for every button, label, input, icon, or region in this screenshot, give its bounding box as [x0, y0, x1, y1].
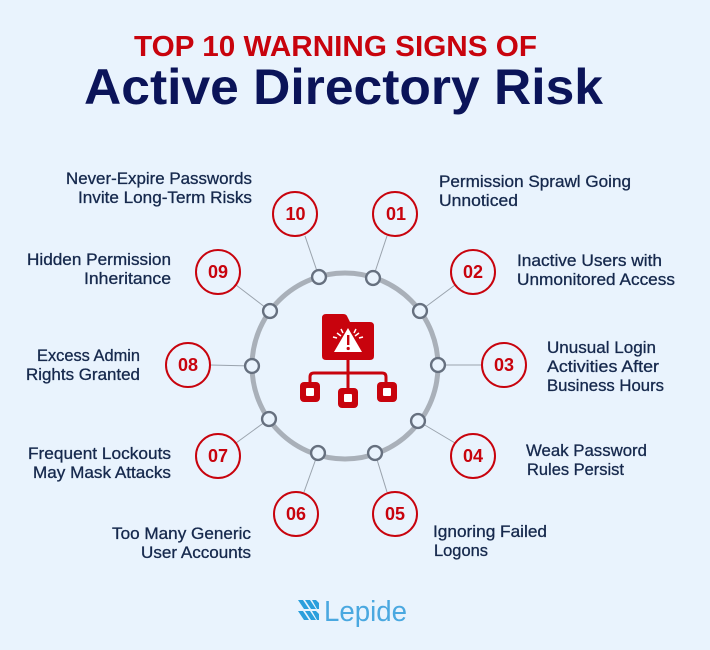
item 05: 05: [385, 504, 405, 524]
item 06: Too Many Generic: [112, 525, 251, 543]
item 04: [451, 434, 647, 479]
item 09: Inheritance: [84, 270, 171, 288]
title: Active Directory Risk: [84, 59, 603, 115]
item 01: Permission Sprawl Going: [439, 173, 631, 191]
item 09: [27, 250, 240, 294]
item 04: 04: [463, 446, 483, 466]
item 03: Unusual Login: [547, 339, 656, 357]
item 10: [66, 170, 317, 236]
ring nodes: [245, 270, 445, 460]
item 07: Frequent Lockouts: [28, 445, 171, 463]
item 06: [112, 492, 318, 562]
item 09: 09: [208, 262, 228, 282]
item 05: [373, 492, 547, 560]
connector lines: [210, 236, 482, 492]
item 08: Excess Admin: [37, 347, 140, 365]
item 01: Unnoticed: [439, 192, 518, 210]
icon: folder warning network: [300, 314, 397, 408]
item 01: 01: [386, 204, 406, 224]
item 07: [28, 434, 240, 482]
item 08: 08: [178, 355, 198, 375]
item 02: 02: [463, 262, 483, 282]
item 03: [482, 339, 664, 395]
item 05: Ignoring Failed: [433, 523, 547, 541]
item 04: Weak Password: [526, 442, 647, 460]
item 04: Rules Persist: [527, 461, 624, 479]
ring: [252, 273, 438, 459]
item 02: Unmonitored Access: [517, 271, 675, 289]
item 08: Rights Granted: [26, 366, 140, 384]
item 06: 06: [286, 504, 306, 524]
item 08: [26, 343, 210, 387]
item 10: 10: [285, 204, 306, 224]
title: TOP 10 WARNING SIGNS OF: [134, 31, 537, 63]
logo: Lepide: Lepide: [324, 596, 407, 628]
item 10: Invite Long-Term Risks: [78, 189, 252, 207]
item 07: 07: [208, 446, 228, 466]
item 05: Logons: [434, 542, 488, 560]
item 01: [373, 173, 631, 236]
item 03: Activities After: [547, 358, 660, 376]
item 10: Never-Expire Passwords: [66, 170, 252, 188]
item 06: User Accounts: [141, 544, 251, 562]
item 02: Inactive Users with: [517, 252, 662, 270]
item 07: May Mask Attacks: [33, 464, 171, 482]
item 09: Hidden Permission: [27, 251, 171, 269]
item 03: 03: [494, 355, 514, 375]
title: [84, 31, 603, 115]
item 02: [451, 250, 675, 294]
item 03: Business Hours: [547, 377, 664, 395]
